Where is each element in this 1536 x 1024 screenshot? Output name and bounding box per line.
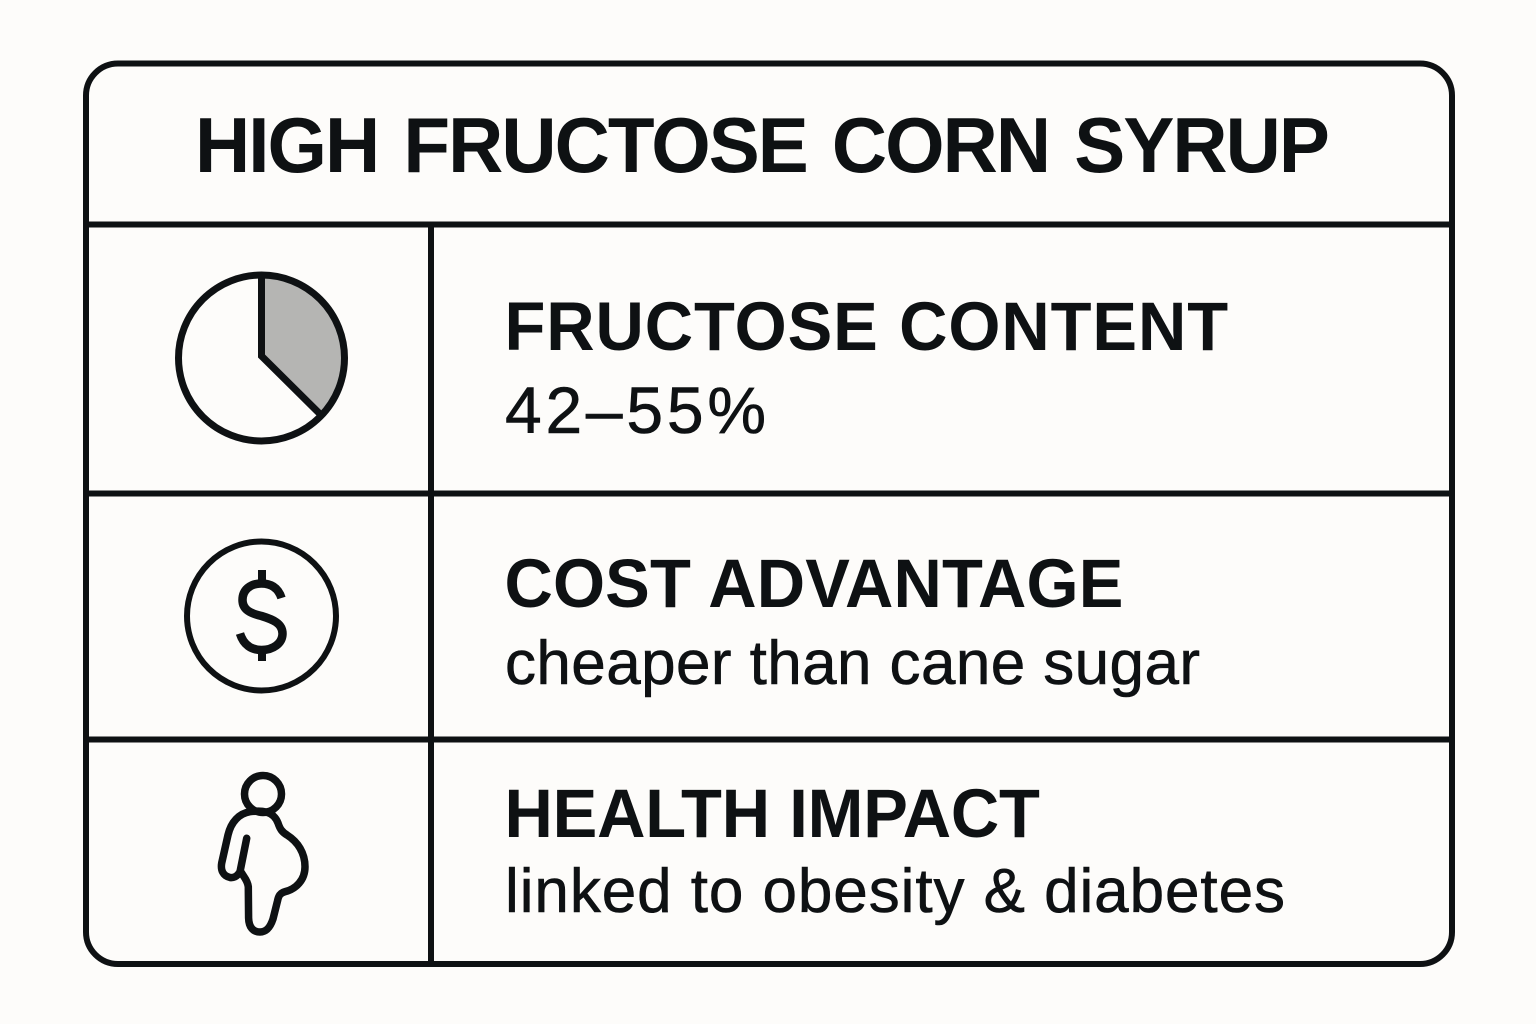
panel: cost advantage [187, 542, 1200, 698]
icon: pie chart [178, 274, 344, 441]
heading: cost advantage: COST ADVANTAGE [504, 545, 1123, 622]
panel: health impact [221, 775, 1285, 932]
panel: fructose content [178, 274, 1228, 447]
heading: fructose content: FRUCTOSE CONTENT [504, 288, 1228, 365]
value: fructose percentage: 42–55% [505, 373, 766, 447]
table frame [86, 64, 1452, 964]
icon: dollar coin [187, 542, 336, 690]
heading: health impact: HEALTH IMPACT [504, 775, 1040, 852]
value: health effects: linked to obesity & diabetes [505, 857, 1285, 926]
value: cost comparison: cheaper than cane sugar [505, 629, 1200, 698]
title: HIGH FRUCTOSE CORN SYRUP [195, 102, 1330, 189]
icon: person with large belly [221, 776, 305, 932]
